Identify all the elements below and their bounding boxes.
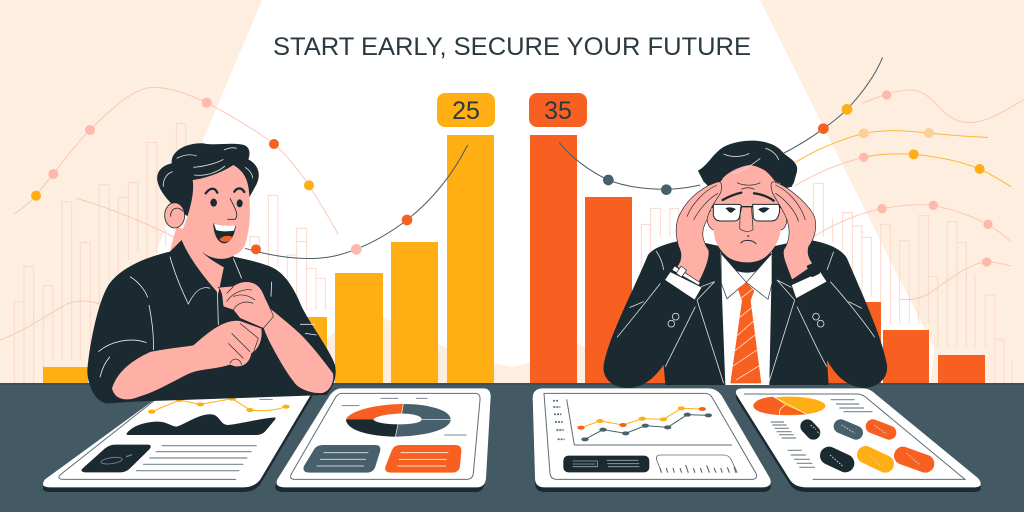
character: happy young man [87,143,336,403]
ear [165,203,185,228]
face [712,164,783,264]
label: 25: 25 [452,97,480,125]
pie chart [753,397,825,415]
face [183,165,250,257]
hand: clasped [218,282,273,328]
eyes and brows [206,188,244,193]
title: START EARLY, SECURE YOUR FUTURE [273,33,751,61]
curve: worried savings line with dots [559,57,883,195]
background chart: right pink bars [641,183,1012,383]
label: 25 [437,93,495,127]
panel: report sheet with pie chart and tags [736,388,981,492]
neck [168,227,233,297]
label: 35: 35 [544,97,572,125]
bar chart: orange bars, start at 35 [530,135,985,384]
label: 35 [529,93,587,127]
panel: report sheet with two-line chart [533,388,771,492]
hair [698,141,797,190]
glasses and eyes [707,183,786,244]
suit [603,239,887,388]
chin shadow [202,252,235,267]
tie [730,282,761,383]
shirt [87,240,336,403]
background curve: left pink trend with dots [0,87,338,340]
mouth [213,223,236,243]
arm: left [112,320,262,400]
hair front [698,147,797,185]
tags [807,426,925,464]
hand: right [771,182,816,280]
cuff: right with watch [790,262,827,299]
panel: report sheet with donut chart [275,388,491,492]
suit details [617,251,875,383]
background curves: right trends with dots [795,90,1024,300]
donut chart [346,404,451,437]
arm: right [260,300,334,393]
chin shadow [721,252,771,273]
cuff: left with watch [665,266,702,300]
bar chart: yellow bars, start at 25 [43,135,494,384]
hand: left [676,182,722,283]
panel: report sheet with line and area chart [43,388,312,492]
shirt [720,252,772,385]
background chart: left pink bars [14,124,325,383]
shirt details [98,257,317,377]
hair back [157,143,259,217]
hair highlights [163,148,253,187]
curve: rising savings line with dots [245,145,468,258]
character: stressed man in suit [603,141,887,388]
background: white spotlight [100,0,935,384]
collar [721,253,772,299]
background: cream [0,0,1024,384]
ears [707,210,787,230]
table [0,383,1024,512]
